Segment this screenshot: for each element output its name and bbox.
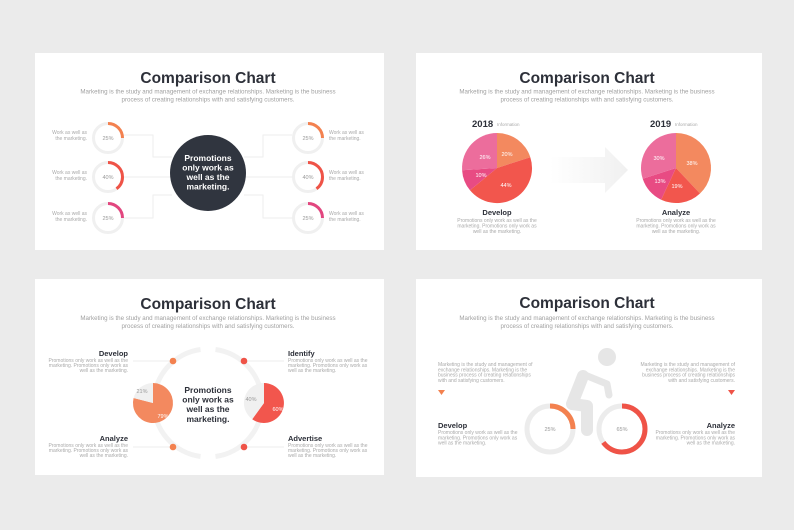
pie 2019: marketing. Promotions only work as bbox=[636, 224, 716, 230]
left text block: with and satisfying customers. bbox=[438, 378, 505, 384]
labels right: marketing. Promotions only work as bbox=[288, 363, 368, 369]
title: Comparison Chart bbox=[140, 296, 276, 313]
side texts: the marketing. bbox=[55, 176, 87, 182]
right text block: exchange relationships. Marketing is the bbox=[646, 367, 735, 373]
pie 2018: 26% bbox=[479, 155, 491, 161]
left text block: well as the marketing. bbox=[438, 441, 486, 447]
connector lines and dots bbox=[133, 361, 284, 447]
subtitle: Marketing is the study and management of exchange relationships. Marketing is the business bbox=[80, 315, 336, 322]
right pie: 40% bbox=[245, 397, 257, 403]
side texts: the marketing. bbox=[55, 217, 87, 223]
pie 2019: 13% bbox=[654, 179, 666, 185]
pie 2019 bbox=[636, 119, 716, 235]
pie 2019: Analyze bbox=[662, 208, 690, 217]
right text block: well as the marketing. bbox=[687, 441, 735, 447]
labels left: Promotions only work as well as the bbox=[49, 358, 128, 364]
left pie: 21% bbox=[136, 389, 148, 395]
panel: top-left circular: the marketing. bbox=[329, 176, 361, 182]
labels right: well as the marketing. bbox=[288, 368, 336, 374]
left pie bbox=[133, 383, 173, 423]
pie 2018: 10% bbox=[475, 173, 487, 179]
labels left: well as the marketing. bbox=[80, 453, 128, 459]
pie 2018: Develop bbox=[482, 208, 512, 217]
pie 2018: 20% bbox=[501, 152, 513, 158]
labels right: Advertise bbox=[288, 434, 322, 443]
labels right: Identify bbox=[288, 349, 315, 358]
donut labels: 25% bbox=[102, 136, 114, 142]
pie 2018: marketing. Promotions only work as bbox=[457, 224, 537, 230]
pie 2018 bbox=[457, 119, 537, 235]
donuts left bbox=[94, 124, 322, 232]
donut labels bbox=[102, 136, 314, 222]
center text: well as the bbox=[186, 404, 230, 414]
donut labels: 25% bbox=[302, 216, 314, 222]
pie 2019: 30% bbox=[653, 156, 665, 162]
donut labels: 40% bbox=[102, 175, 114, 181]
arc ring bbox=[154, 350, 262, 456]
labels right: marketing. Promotions only work as bbox=[288, 448, 368, 454]
title: Comparison Chart bbox=[519, 70, 655, 87]
labels left: Analyze bbox=[100, 434, 128, 443]
left text block: marketing. Promotions only work as bbox=[438, 435, 518, 441]
panel: top-right pies bbox=[416, 53, 762, 250]
left text block: Marketing is the study and management of bbox=[438, 362, 533, 368]
labels left bbox=[49, 349, 128, 459]
donuts bbox=[527, 406, 645, 452]
center text: marketing. bbox=[186, 414, 230, 424]
subtitle: Marketing is the study and management of exchange relationships. Marketing is the business bbox=[80, 88, 336, 96]
right text block: Promotions only work as well as the bbox=[656, 430, 735, 436]
panel: top-left circular: the marketing. bbox=[329, 136, 361, 142]
side texts bbox=[52, 130, 87, 223]
pie 2019: well as the marketing. bbox=[652, 229, 700, 235]
subtitle: Marketing is the study and management of exchange relationships. Marketing is the business bbox=[459, 88, 715, 96]
right text block: Analyze bbox=[707, 421, 735, 430]
right pie: 60% bbox=[272, 407, 284, 413]
donut labels: 40% bbox=[302, 175, 314, 181]
labels left: Promotions only work as well as the bbox=[49, 443, 128, 449]
subtitle: process of creating relationships with and satisfying customers. bbox=[500, 323, 674, 330]
side texts: the marketing. bbox=[55, 136, 87, 142]
panel: top-left circular bbox=[35, 53, 384, 250]
left text block: Develop bbox=[438, 421, 468, 430]
center circle bbox=[170, 135, 246, 211]
labels left: marketing. Promotions only work as bbox=[49, 448, 128, 454]
side texts: Work as well as bbox=[52, 170, 87, 176]
pie 2018: Information bbox=[497, 122, 520, 127]
subtitle: process of creating relationships with and satisfying customers. bbox=[500, 96, 674, 104]
labels right bbox=[288, 349, 368, 459]
title: Comparison Chart bbox=[140, 70, 276, 87]
panel: top-left circular: Work as well as bbox=[329, 170, 364, 176]
panel: bottom-right cyclist: 65% bbox=[616, 427, 628, 433]
right text block bbox=[640, 362, 736, 447]
panel: bottom-left arc bbox=[35, 279, 384, 475]
panel: top-left circular: Work as well as bbox=[329, 130, 364, 136]
side texts: Work as well as bbox=[52, 130, 87, 136]
labels left: well as the marketing. bbox=[80, 368, 128, 374]
center text: Promotions bbox=[184, 385, 232, 395]
right text block: with and satisfying customers. bbox=[668, 378, 735, 384]
labels right: well as the marketing. bbox=[288, 453, 336, 459]
center text: only work as bbox=[182, 395, 234, 405]
subtitle: process of creating relationships with and satisfying customers. bbox=[122, 96, 295, 104]
pie 2018: 2018 bbox=[472, 119, 493, 130]
center circle: Promotions bbox=[184, 153, 232, 163]
right text block: marketing. Promotions only work as bbox=[656, 435, 735, 441]
pie 2019: Promotions only work as well as the bbox=[636, 218, 716, 224]
title: Comparison Chart bbox=[519, 295, 655, 312]
subtitle: process of creating relationships with and satisfying customers. bbox=[122, 323, 295, 330]
left text block bbox=[438, 362, 533, 447]
pie 2019: 19% bbox=[671, 184, 683, 190]
donut labels: 25% bbox=[302, 136, 314, 142]
icon: cyclist bbox=[572, 348, 616, 430]
left text block: business process of creating relationships bbox=[438, 373, 531, 379]
right pie bbox=[244, 383, 284, 423]
pie 2019: 2019 bbox=[650, 119, 671, 130]
pie 2019: 38% bbox=[686, 161, 698, 167]
pie 2018: well as the marketing. bbox=[473, 229, 521, 235]
labels right: Promotions only work as well as the bbox=[288, 358, 368, 364]
panel: bottom-right cyclist bbox=[416, 279, 762, 477]
panel: top-left circular: the marketing. bbox=[329, 217, 361, 223]
center circle: marketing. bbox=[186, 182, 230, 192]
pie 2018: Promotions only work as well as the bbox=[457, 218, 537, 224]
panel: bottom-right cyclist: 25% bbox=[544, 427, 556, 433]
side texts: Work as well as bbox=[52, 211, 87, 217]
panel: top-left circular: Work as well as bbox=[329, 211, 364, 217]
donut labels: 25% bbox=[102, 216, 114, 222]
labels right: Promotions only work as well as the bbox=[288, 443, 368, 449]
pie 2018: 44% bbox=[500, 183, 512, 189]
pie 2019: Information bbox=[675, 122, 698, 127]
center circle: well as the bbox=[186, 172, 230, 182]
left text block: exchange relationships. Marketing is the bbox=[438, 367, 527, 373]
right text block: Marketing is the study and management of bbox=[640, 362, 736, 368]
labels left: Develop bbox=[99, 349, 128, 358]
left pie: 79% bbox=[157, 414, 169, 420]
left text block: Promotions only work as well as the bbox=[438, 430, 518, 436]
subtitle: Marketing is the study and management of exchange relationships. Marketing is the business bbox=[459, 315, 715, 322]
connectors bbox=[124, 135, 292, 218]
center circle: only work as bbox=[182, 162, 234, 172]
right text block: business process of creating relationships bbox=[642, 373, 735, 379]
labels left: marketing. Promotions only work as bbox=[49, 363, 128, 369]
